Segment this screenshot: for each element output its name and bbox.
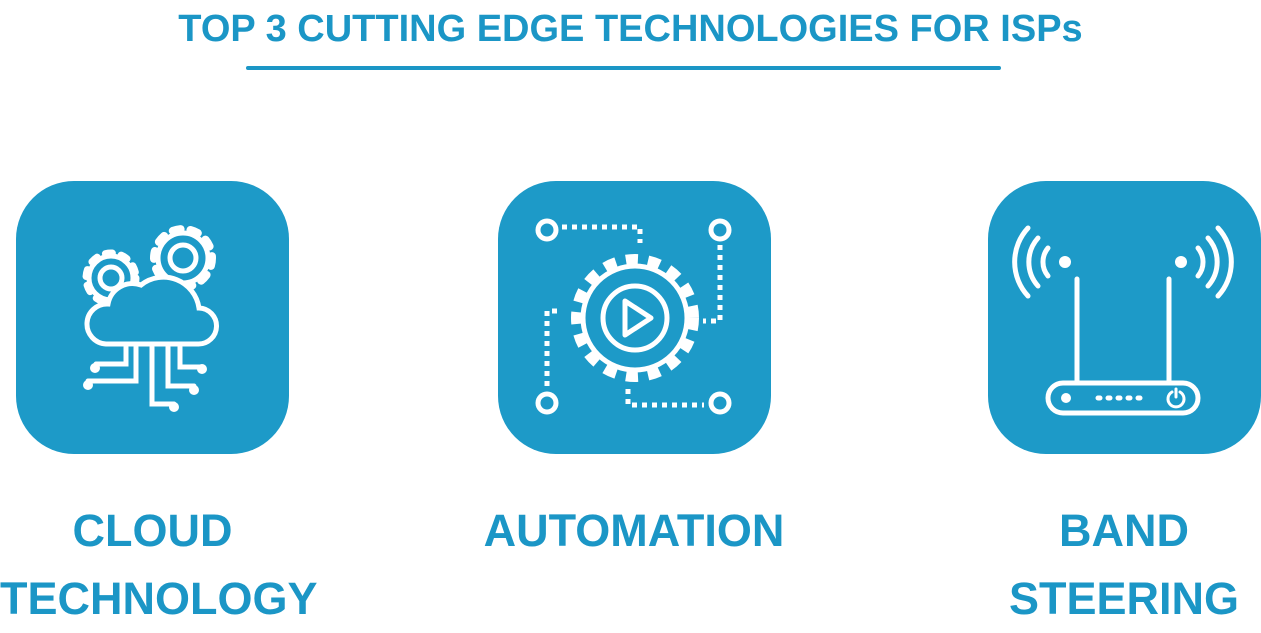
- icon: circuit lines: [83, 347, 207, 412]
- panel: cloud technology icon: [16, 181, 289, 454]
- panel: automation icon: [498, 181, 771, 454]
- label: cloud technology: CLOUD: [72, 505, 232, 556]
- icon: corner nodes and dotted links: [538, 221, 729, 412]
- icon: small gear: [86, 253, 136, 303]
- label: band steering: STEERING: [1009, 573, 1239, 624]
- title underline: [246, 66, 1001, 70]
- icon: big gear: [154, 229, 212, 287]
- panel: band steering icon: [988, 181, 1261, 454]
- icon: cloud: [87, 277, 217, 344]
- icon: router: [1048, 279, 1198, 413]
- icon: gear with play: [577, 260, 693, 376]
- label: cloud technology: TECHNOLOGY: [0, 573, 318, 624]
- label: band steering: BAND: [1059, 505, 1189, 556]
- label: automation: AUTOMATION: [484, 505, 784, 556]
- label: cloud technology: [0, 505, 318, 624]
- title: TOP 3 CUTTING EDGE TECHNOLOGIES FOR ISPs: [178, 8, 1083, 50]
- icon: wifi waves: [1015, 228, 1231, 296]
- label: band steering: [1009, 505, 1239, 624]
